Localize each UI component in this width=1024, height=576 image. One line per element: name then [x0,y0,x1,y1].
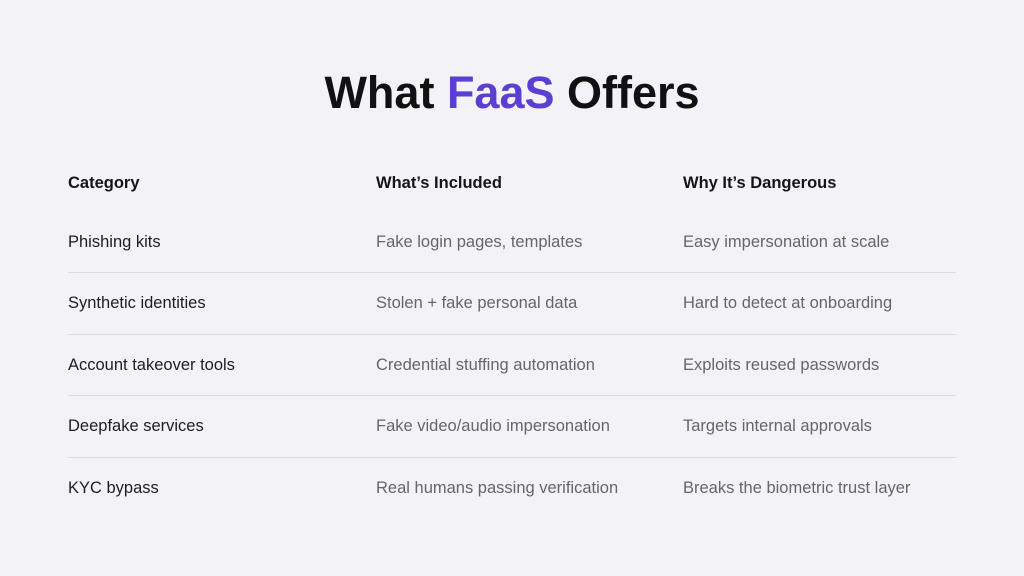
row: phishing kits: Easy impersonation at scale [683,233,889,251]
row: account takeover: Exploits reused passwords [683,356,879,374]
header: included: What’s Included [376,174,502,192]
row: kyc bypass: Breaks the biometric trust layer [683,479,910,497]
row: deepfake: Deepfake services [68,417,204,435]
row: phishing kits: Fake login pages, templates [376,233,582,251]
row: synthetic identities: Stolen + fake personal data [376,294,577,312]
title: What FaaS Offers [324,67,700,118]
row: synthetic identities: Synthetic identities [68,294,206,312]
header: dangerous: Why It’s Dangerous [683,174,836,192]
row: deepfake [68,417,872,435]
row: phishing kits [68,233,889,251]
header: category: Category [68,174,140,192]
row: phishing kits: Phishing kits [68,233,161,251]
row: kyc bypass: KYC bypass [68,479,159,497]
row: account takeover: Account takeover tools [68,356,235,374]
row: kyc bypass: Real humans passing verification [376,479,618,497]
row: synthetic identities: Hard to detect at onboarding [683,294,892,312]
row: account takeover: Credential stuffing automation [376,356,595,374]
row: kyc bypass [68,479,910,497]
row: synthetic identities [68,294,892,312]
row: account takeover [68,356,879,374]
row: deepfake: Fake video/audio impersonation [376,417,610,435]
row: deepfake: Targets internal approvals [683,417,872,435]
